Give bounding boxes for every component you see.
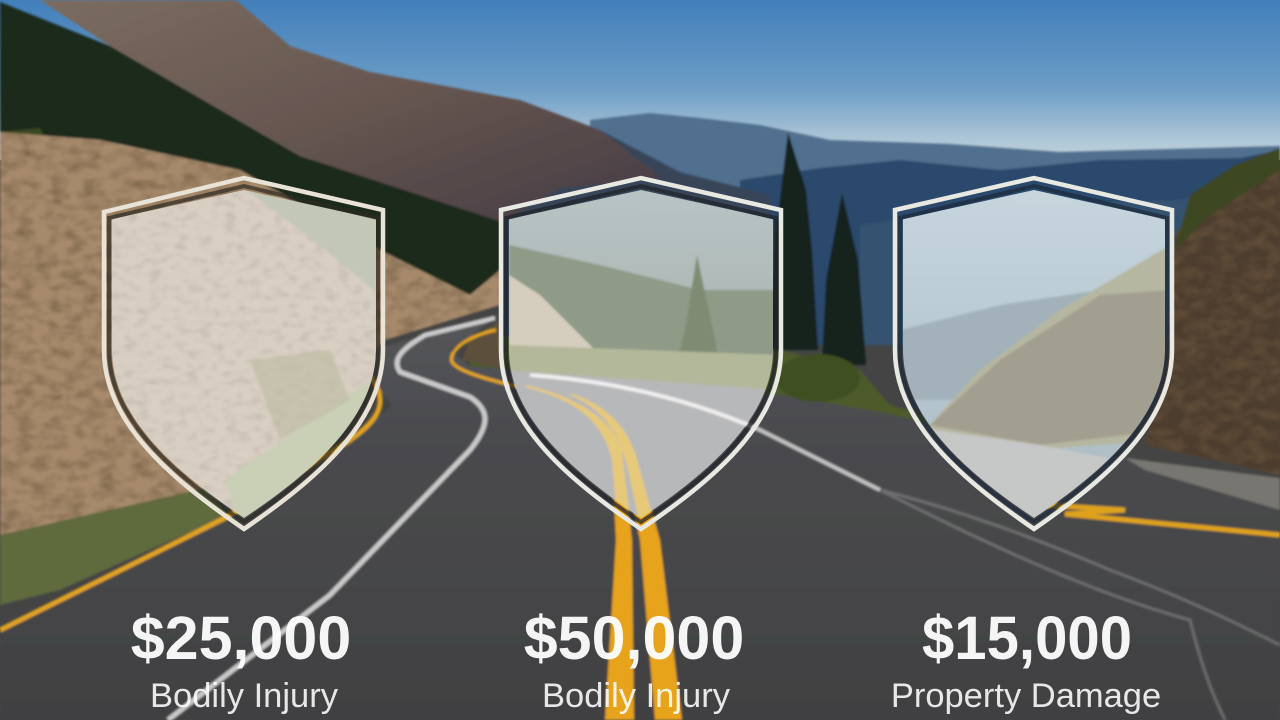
label: $50,000 Bodily Injury: Bodily Injury xyxy=(542,677,731,715)
double yellow line far section xyxy=(452,330,530,390)
right white line xyxy=(530,375,880,490)
grass verge xyxy=(0,488,228,605)
forest xyxy=(0,2,502,295)
bushes by trees xyxy=(776,354,860,402)
pavement cracks fan xyxy=(880,490,1280,720)
label: $25,000 Bodily Injury: $25,000 xyxy=(131,604,351,672)
label: $50,000 Bodily Injury xyxy=(524,604,744,715)
hillside left xyxy=(0,132,500,535)
trees xyxy=(770,132,818,350)
big rock mountain xyxy=(40,0,662,222)
far ranges xyxy=(590,113,1280,345)
double yellow line near left band xyxy=(525,386,634,720)
label: $25,000 Bodily Injury xyxy=(131,604,351,715)
right yellow line xyxy=(1045,505,1280,535)
shield: bodily injury 50,000 xyxy=(500,178,790,530)
left yellow edge line xyxy=(0,355,380,630)
label: $25,000 Bodily Injury: Bodily Injury xyxy=(150,677,339,715)
hillside right xyxy=(1145,150,1280,475)
white centre line xyxy=(168,318,495,720)
road surface xyxy=(0,315,1280,720)
label: $15,000 Property Damage xyxy=(891,604,1161,715)
label: $50,000 Bodily Injury: $50,000 xyxy=(524,604,744,672)
label: $15,000 Property Damage: $15,000 xyxy=(922,604,1132,672)
shield: bodily injury 25,000 xyxy=(100,178,390,530)
gravel shoulder xyxy=(1125,458,1280,510)
shield: property damage 15,000 xyxy=(890,178,1180,530)
far verge bushes and dirt bank xyxy=(470,335,1125,458)
double yellow line near right band xyxy=(560,390,682,720)
label: $15,000 Property Damage: Property Damage xyxy=(891,677,1161,715)
